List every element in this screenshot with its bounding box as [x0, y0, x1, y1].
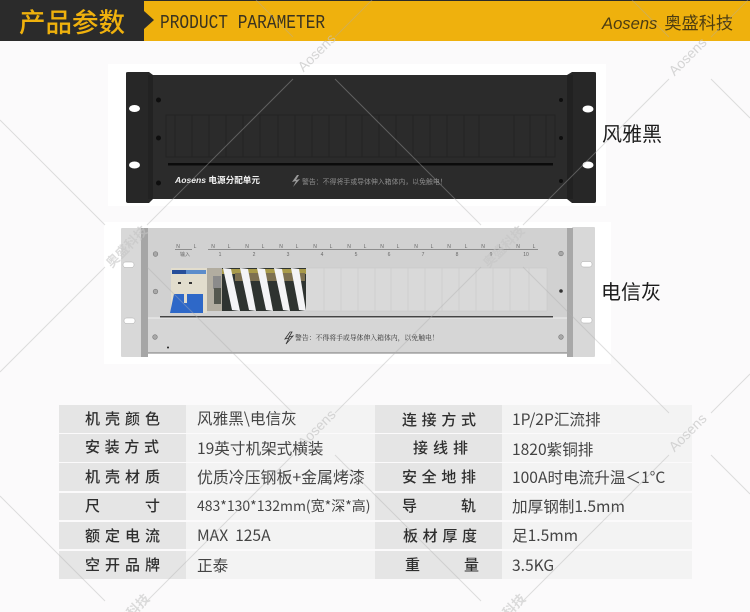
- row 1: 风雅黑\电信灰: [197, 407, 297, 429]
- row 4: 483*130*132mm(宽*深*高): [197, 496, 370, 516]
- terminal labels: 输入: [180, 251, 190, 258]
- terminal labels: N: [279, 244, 283, 250]
- row 6: [59, 551, 554, 579]
- terminal labels: N: [245, 244, 249, 250]
- row 4: 尺寸: [85, 495, 160, 516]
- row 5: [59, 522, 578, 549]
- terminal labels: 5: [355, 252, 358, 258]
- terminal labels: 2: [253, 252, 256, 258]
- terminal labels: 9: [490, 252, 493, 258]
- terminal labels: N: [313, 244, 317, 250]
- row 1: 机壳颜色: [85, 408, 160, 429]
- terminal labels: 4: [321, 252, 324, 258]
- warning icon: [292, 175, 300, 187]
- din rail window: [207, 268, 306, 311]
- row 2: 安装方式: [85, 436, 159, 457]
- row 1: 连接方式: [402, 409, 476, 430]
- brand: Aosens 奥盛科技: [602, 9, 733, 34]
- row 6: 3.5KG: [512, 554, 554, 576]
- blank module plates: [306, 268, 547, 311]
- row 1: 1P/2P汇流排: [512, 408, 601, 430]
- panel: grey product photo: [121, 227, 595, 357]
- label: grey colour: 电信灰: [601, 276, 661, 305]
- terminal labels: 8: [456, 252, 459, 258]
- terminal labels: L: [397, 244, 400, 250]
- row 1: [59, 405, 601, 433]
- warning text: 警告：不得将手或导体伸入箱体内，以免触电！: [295, 332, 439, 343]
- row 3: 机壳材质: [85, 466, 160, 487]
- header yellow strip: [144, 1, 750, 41]
- row 2: 19英寸机架式横装: [197, 437, 323, 459]
- terminal labels: 1: [219, 252, 222, 258]
- row 2: 1820紫铜排: [512, 438, 593, 460]
- terminal labels: N: [481, 244, 485, 250]
- watermark overlay: 奥盛科技: [478, 221, 528, 271]
- row 5: 板材厚度: [403, 525, 477, 546]
- terminal labels: N: [347, 244, 351, 250]
- row 2: [59, 434, 593, 462]
- terminal labels: N: [176, 244, 180, 250]
- row 6: 重量: [405, 554, 479, 575]
- terminal labels: L: [533, 244, 536, 250]
- terminal labels: L: [431, 244, 434, 250]
- row 4: 导轨: [402, 495, 476, 516]
- terminal labels: L: [262, 244, 265, 250]
- terminal labels: [176, 244, 536, 258]
- watermark overlay: Aosens: [665, 410, 710, 455]
- header bar: [0, 0, 750, 41]
- title: chinese: 产品参数: [19, 1, 125, 40]
- watermark overlay: Aosens: [294, 30, 339, 75]
- terminal labels: L: [499, 244, 502, 250]
- terminal labels: 3: [287, 252, 290, 258]
- terminal labels: 7: [422, 252, 425, 258]
- row 6: 空开品牌: [85, 554, 160, 575]
- device label: Aosens 电源分配单元: [174, 174, 260, 185]
- terminal labels: 10: [523, 252, 529, 258]
- watermark overlay: 奥盛科技: [101, 221, 151, 271]
- row 3: 100A时电流升温＜1°C: [512, 466, 665, 488]
- terminal labels: L: [465, 244, 468, 250]
- row 5: MAX 125A: [197, 524, 271, 546]
- row 3: 优质冷压钢板+金属烤漆: [197, 465, 365, 488]
- terminal labels: L: [296, 244, 299, 250]
- warning icon: [285, 332, 293, 344]
- row 4: [59, 493, 625, 520]
- row 2: 接线排: [413, 437, 468, 458]
- terminal labels: L: [194, 244, 197, 250]
- title: english: PRODUCT PARAMETER: [160, 12, 325, 34]
- row 6: 正泰: [197, 554, 228, 576]
- watermark overlay: Aosens: [294, 406, 339, 451]
- terminal labels: N: [211, 244, 215, 250]
- terminal labels: N: [414, 244, 418, 250]
- terminal labels: L: [228, 244, 231, 250]
- row 5: 额定电流: [85, 525, 160, 546]
- row 3: [59, 463, 665, 491]
- row 3: 安全地排: [402, 466, 476, 487]
- panel: black product photo: [126, 72, 596, 203]
- terminal labels: 6: [388, 252, 391, 258]
- watermark overlay: Aosens: [665, 34, 710, 79]
- row 4: 加厚钢制1.5mm: [512, 495, 625, 517]
- row 5: 足1.5mm: [512, 524, 578, 546]
- warning text: 警告：不得将手或导体伸入箱体内，以免触电！: [302, 176, 447, 186]
- label: black colour: 风雅黑: [602, 118, 662, 147]
- header notch arrow: [144, 11, 154, 29]
- terminal labels: N: [516, 244, 520, 250]
- terminal labels: N: [447, 244, 451, 250]
- terminal labels: L: [330, 244, 333, 250]
- circuit breaker: [170, 268, 207, 313]
- terminal labels: L: [364, 244, 367, 250]
- terminal labels: N: [380, 244, 384, 250]
- parameter table: [59, 405, 665, 579]
